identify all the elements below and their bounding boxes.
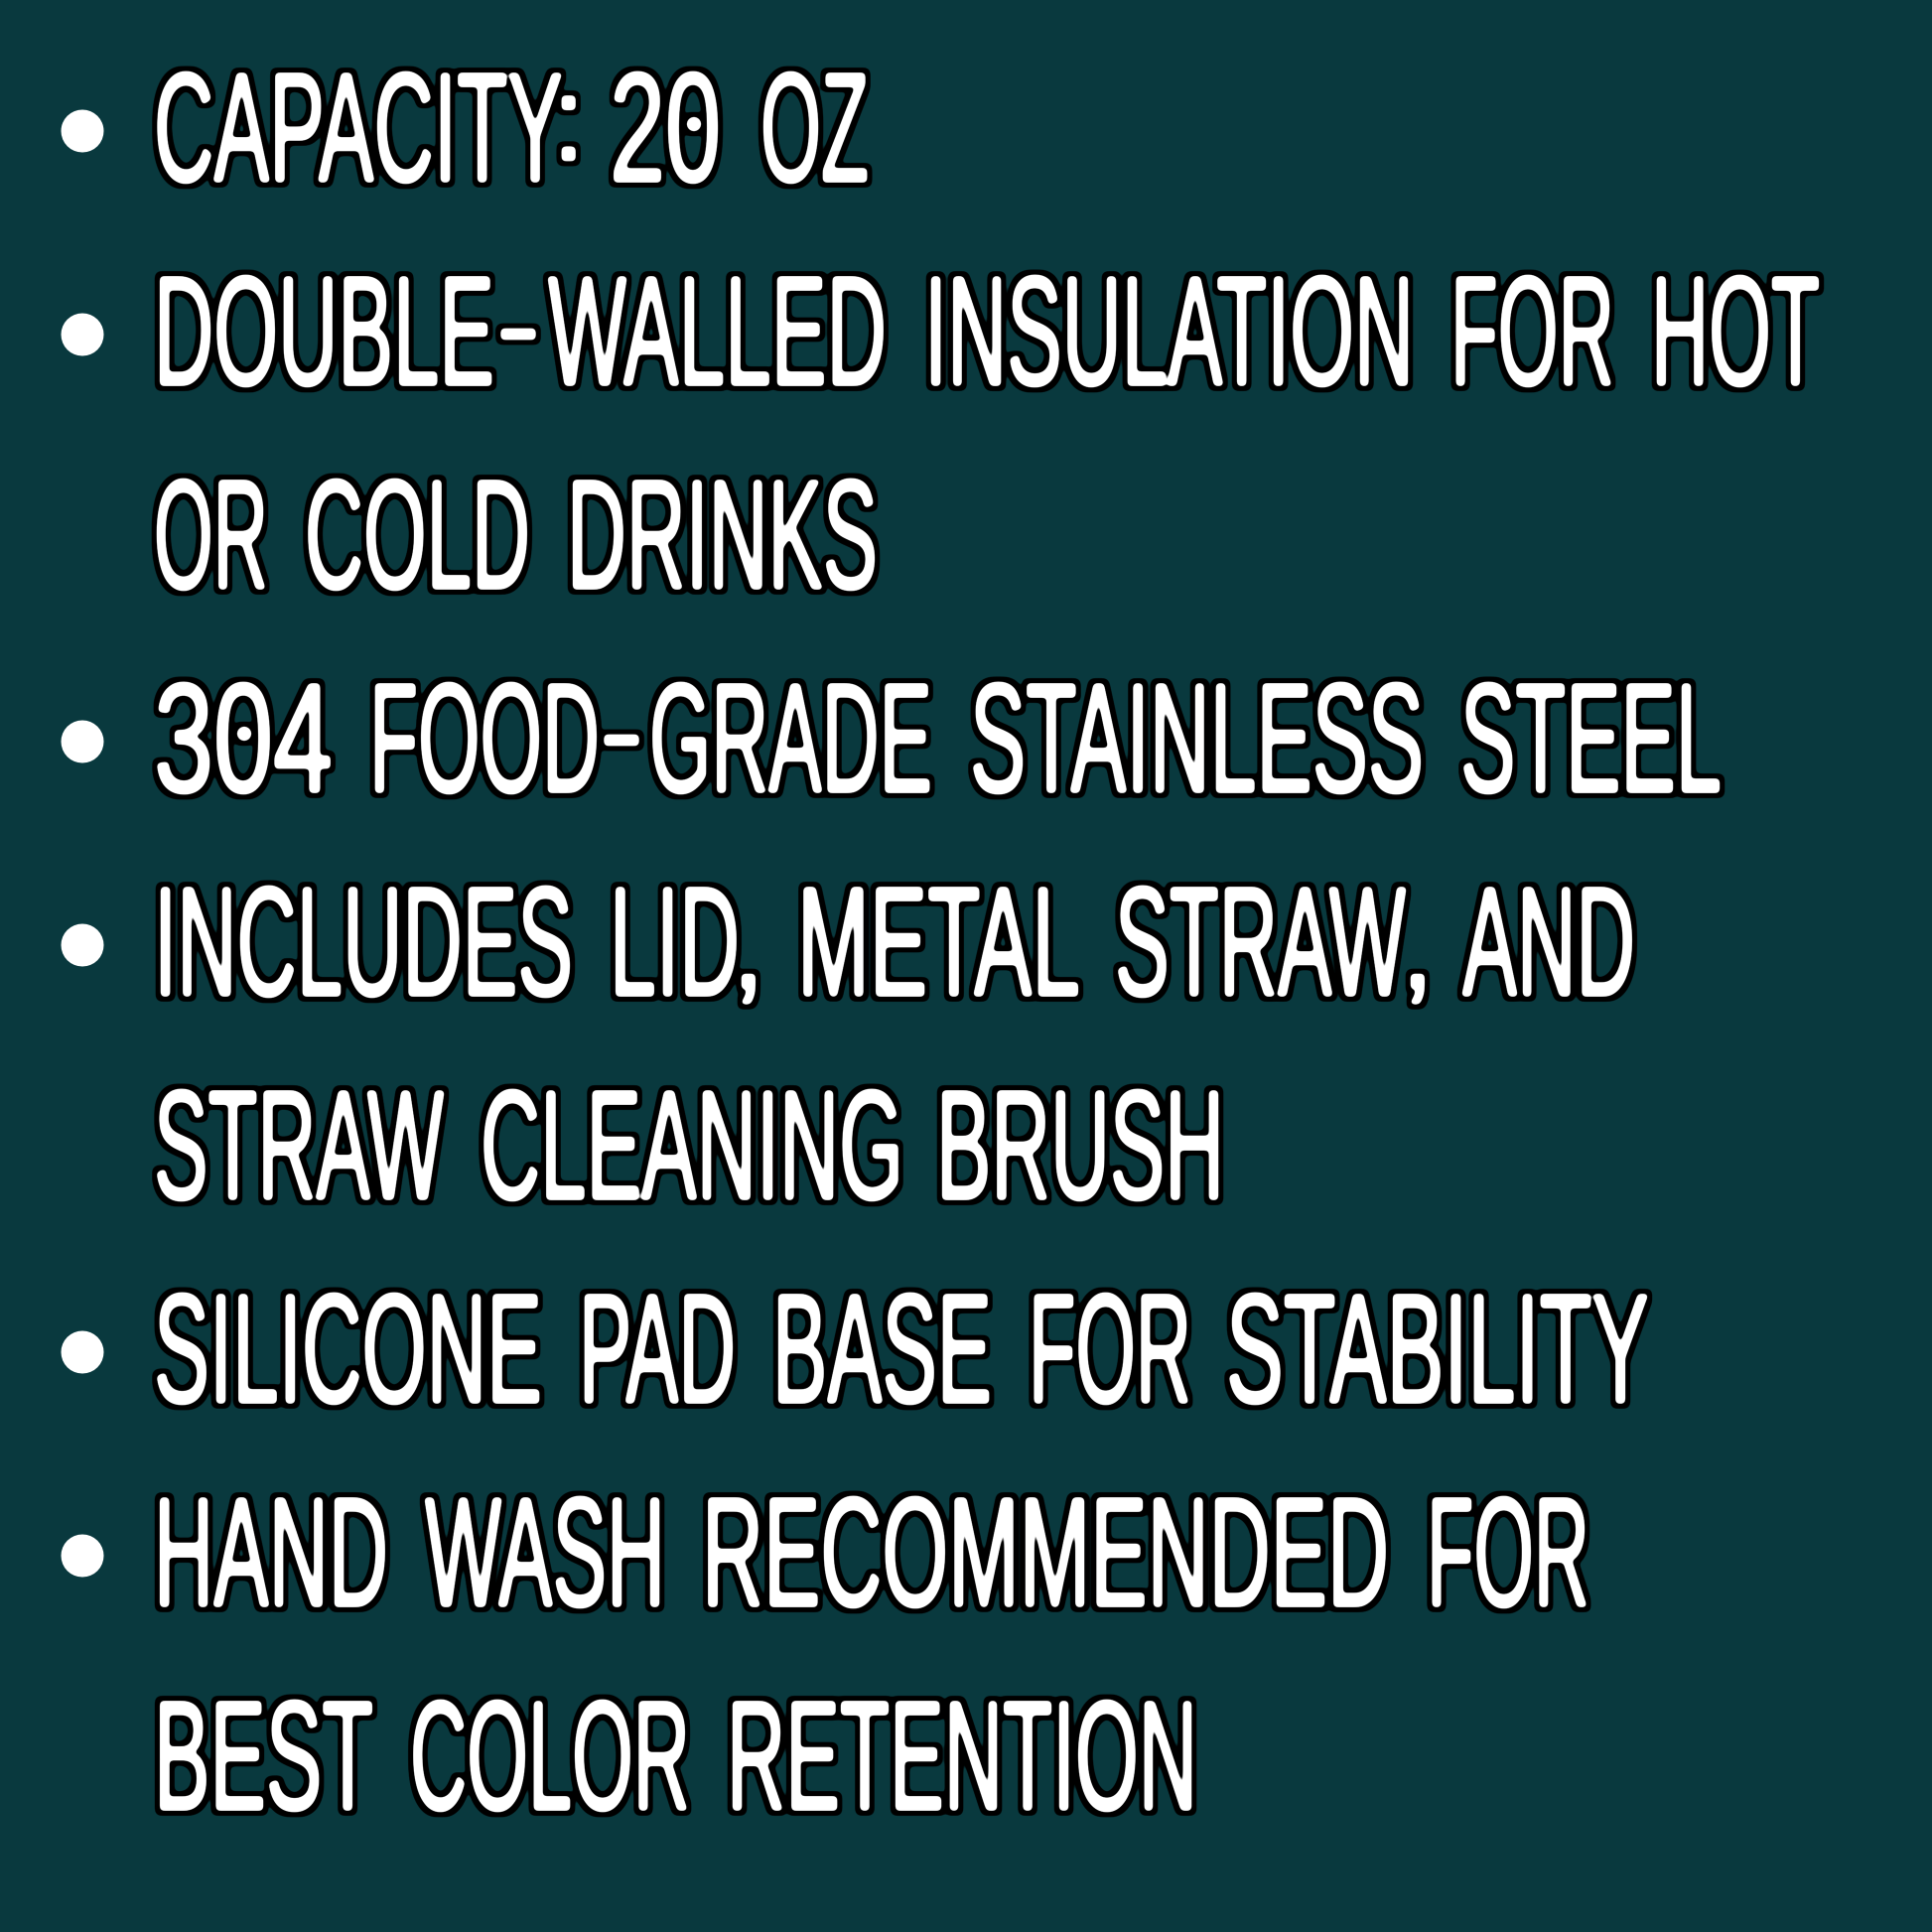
list item: insulation: INSULATION: [924, 244, 1414, 419]
list item: included accessories: ,: [1401, 881, 1434, 1014]
list item: hand wash: WASH: [425, 1465, 665, 1640]
list item: insulation: COLD: [305, 449, 530, 621]
list item: silicone base: BASE: [772, 1263, 992, 1436]
list item: capacity: 20: [610, 42, 721, 214]
list item: silicone base: SILICONE: [154, 1263, 542, 1436]
list item: included accessories: BRUSH: [936, 1058, 1224, 1233]
list item: included accessories: METAL: [797, 856, 1080, 1029]
list item: insulation: -: [496, 262, 540, 389]
list item: steel: 304: [154, 651, 333, 826]
list item: included accessories: INCLUDES: [154, 856, 573, 1029]
list item: included accessories: ,: [732, 881, 764, 1014]
list item: steel: FOOD: [369, 651, 600, 826]
list item: capacity: CAPACITY: [154, 42, 563, 214]
list item: included accessories: [62, 856, 1635, 1233]
list item: steel: STAINLESS: [970, 651, 1424, 826]
list item: hand wash: [62, 1465, 1589, 1843]
list item: insulation: DOUBLE: [154, 244, 494, 419]
list item: insulation: WALLED: [548, 244, 887, 419]
feature list infographic: OZ: [760, 42, 869, 214]
list item: insulation: DRINKS: [567, 449, 878, 621]
list item: hand wash: BEST: [154, 1670, 373, 1843]
list item: hand wash: RECOMMENDED: [702, 1465, 1389, 1640]
list item: hand wash: RETENTION: [727, 1670, 1197, 1843]
list item: silicone base: PAD: [579, 1263, 736, 1436]
list item: included accessories: LID: [610, 856, 740, 1029]
list item: included accessories: AND: [1462, 856, 1635, 1029]
list item: steel: -: [600, 668, 643, 795]
list item: included accessories: STRAW: [154, 1058, 444, 1233]
list item: steel: [62, 651, 1722, 826]
list item: steel: GRADE: [649, 651, 932, 826]
list item: silicone base: FOR: [1029, 1263, 1191, 1436]
list item: silicone base: [62, 1263, 1649, 1436]
list item: included accessories: CLEANING: [481, 1058, 903, 1233]
list item: insulation: OR: [154, 449, 268, 621]
list item: hand wash: HAND: [154, 1465, 388, 1640]
list item: insulation: FOR: [1450, 244, 1614, 419]
feature list infographic: FOR: [1427, 1465, 1589, 1640]
list item: hand wash: COLOR: [410, 1670, 690, 1843]
list item: capacity: :: [552, 53, 585, 186]
list item: included accessories: STRAW: [1115, 856, 1406, 1029]
list item: insulation: [62, 244, 1820, 621]
